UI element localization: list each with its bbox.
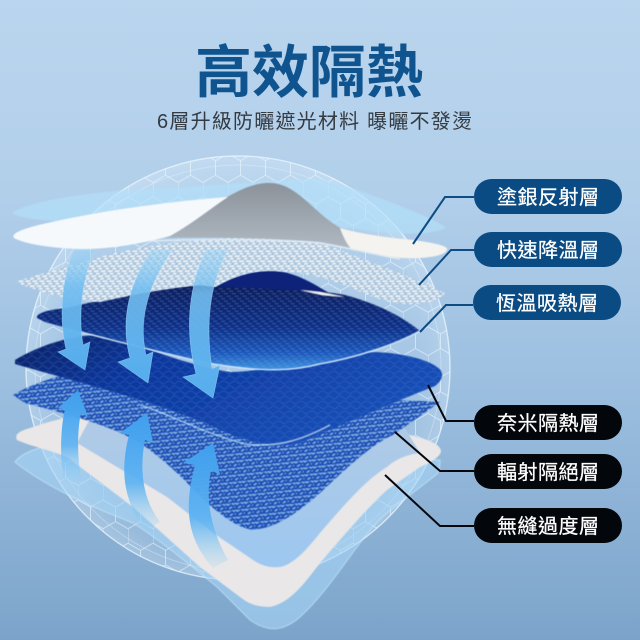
hexagon globe: [20, 150, 460, 590]
layer 3: constant temperature absorption layer: [37, 271, 420, 370]
subtitle: 6層升級防曬遮光材料 曝曬不發燙: [157, 110, 472, 133]
label: nano insulation layer: [428, 385, 622, 440]
label: constant temperature absorption layer: [420, 285, 621, 332]
label: nano insulation layer: 奈米隔熱層: [497, 412, 599, 435]
layer 6: seamless transition layer: [15, 400, 441, 629]
label: seamless transition layer: 無縫過度層: [497, 515, 599, 538]
label: constant temperature absorption layer: 恆溫吸熱層: [496, 292, 598, 315]
layer 4: nano insulation layer: [15, 335, 442, 445]
layer 2: fast cooling layer: [15, 238, 445, 304]
layer 5: radiation barrier layer: [13, 372, 440, 530]
label: fast cooling layer: [419, 232, 622, 285]
label: fast cooling layer: 快速降溫層: [497, 239, 599, 262]
label: silver reflective layer: 塗銀反射層: [497, 186, 599, 209]
label: silver reflective layer: [413, 179, 622, 244]
label: radiation barrier layer: [395, 432, 622, 489]
label: seamless transition layer: [385, 475, 622, 543]
arrows: heat blocked downward: [58, 250, 228, 398]
label: radiation barrier layer: 輻射隔絕層: [497, 461, 599, 484]
layer 1: silver reflective layer: [12, 178, 447, 259]
title: 高效隔熱: [195, 41, 423, 105]
arrows: heat rising upward: [58, 390, 228, 568]
